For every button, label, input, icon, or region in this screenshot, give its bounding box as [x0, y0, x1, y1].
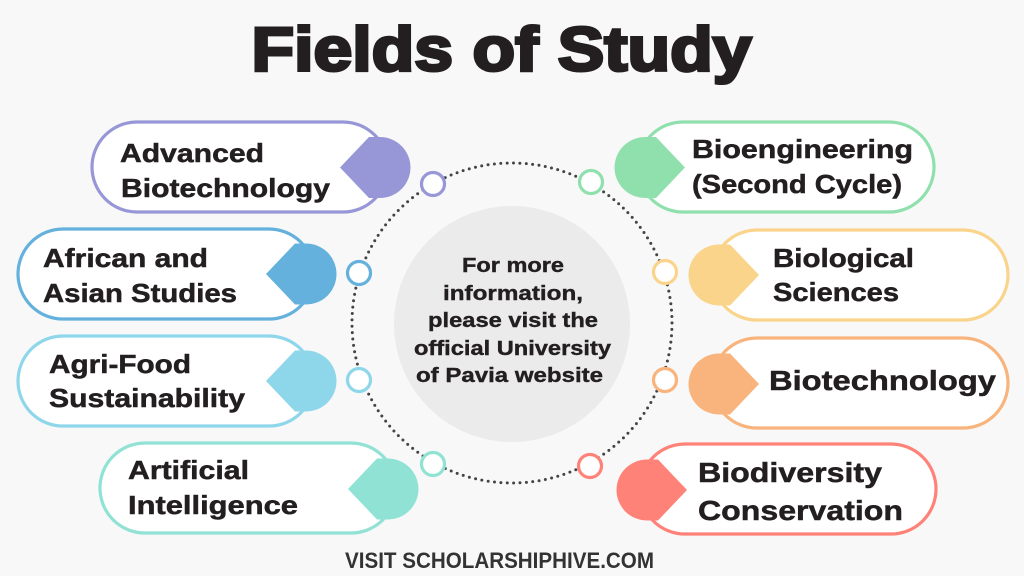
- panel: Advanced Biotechnology: Biotechnology: [121, 173, 331, 203]
- panel: Advanced Biotechnology: Advanced: [120, 138, 264, 168]
- panel: Agri-Food Sustainability: Agri-Food: [49, 349, 191, 379]
- panel: Biodiversity Conservation: Conservation: [698, 495, 903, 526]
- center circle callout: official University: [414, 338, 612, 360]
- center circle callout: please visit the: [428, 310, 598, 332]
- panel: Agri-Food Sustainability: [18, 336, 336, 426]
- panel: Biological Sciences: Sciences: [773, 277, 899, 307]
- panel: African and Asian Studies: [18, 229, 336, 319]
- panel: African and Asian Studies: African and: [43, 243, 208, 273]
- center circle callout: [394, 206, 630, 442]
- panel: Artificial Intelligence: Intelligence: [128, 490, 298, 520]
- center circle callout: For more: [462, 255, 564, 277]
- panel: Artificial Intelligence: Artificial: [128, 455, 249, 485]
- panel: Biotechnology: [688, 338, 1008, 428]
- panel: Advanced Biotechnology: [92, 122, 410, 212]
- panel: Bioengineering (Second Cycle): Bioengineering: [692, 134, 913, 164]
- ring nodes: [348, 170, 676, 478]
- center circle callout: of Pavia website: [416, 365, 603, 387]
- panel: Biotechnology: Biotechnology: [769, 365, 996, 396]
- panel: Biological Sciences: [688, 230, 1008, 320]
- panel: Biological Sciences: Biological: [773, 243, 914, 273]
- panel: Biodiversity Conservation: [616, 444, 936, 534]
- panel: Biodiversity Conservation: Biodiversity: [698, 457, 882, 488]
- footer text: VISIT SCHOLARSHIPHIVE.COM: [345, 548, 654, 573]
- panel: Bioengineering (Second Cycle): [615, 122, 934, 212]
- center circle callout: information,: [443, 283, 583, 305]
- title: Fields of Study: [252, 15, 752, 84]
- panel: Bioengineering (Second Cycle): (Second Cycle): [692, 169, 902, 199]
- dotted ring: [352, 163, 672, 483]
- panel: African and Asian Studies: Asian Studies: [43, 278, 237, 308]
- panel: Artificial Intelligence: [100, 443, 418, 533]
- panel: Agri-Food Sustainability: Sustainability: [49, 383, 246, 413]
